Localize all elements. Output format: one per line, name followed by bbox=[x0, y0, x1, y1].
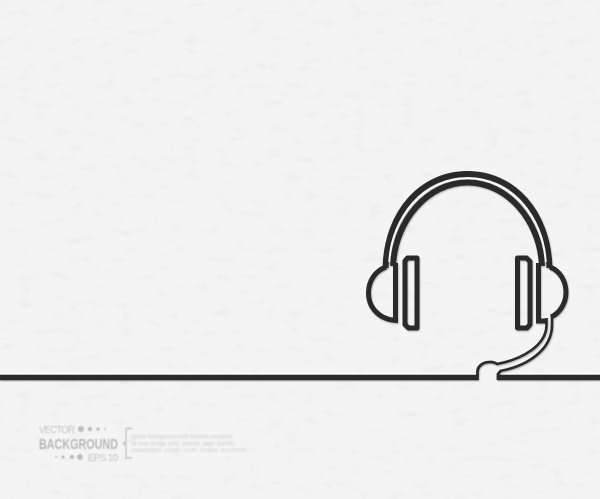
description text bbox=[131, 434, 245, 454]
label: eps 10: EPS 10 bbox=[88, 453, 119, 464]
label: vector: VECTOR bbox=[39, 425, 75, 436]
headband bbox=[386, 174, 550, 268]
description text: presentation, poster, cover, booklet, document bbox=[131, 448, 245, 454]
right ear cup bbox=[538, 263, 566, 321]
description text: for your design, print, website, page, banner, bbox=[131, 442, 235, 448]
vector background badge bbox=[39, 425, 245, 464]
right ear pad bbox=[518, 258, 530, 328]
dots: bottom row bbox=[55, 454, 83, 460]
description text: Vector background with isolated elements bbox=[131, 434, 233, 440]
white highlight above line bbox=[0, 372, 600, 374]
bracket pointer bbox=[123, 441, 125, 446]
microphone boom bbox=[497, 316, 552, 371]
microphone base and horizontal line bbox=[0, 362, 600, 380]
heading: background: BACKGROUND bbox=[39, 436, 118, 453]
headset line icon bbox=[0, 174, 600, 380]
left ear cup bbox=[368, 263, 398, 322]
bracket bbox=[126, 428, 132, 458]
dots: top row bbox=[78, 426, 106, 432]
left ear pad bbox=[405, 258, 417, 328]
